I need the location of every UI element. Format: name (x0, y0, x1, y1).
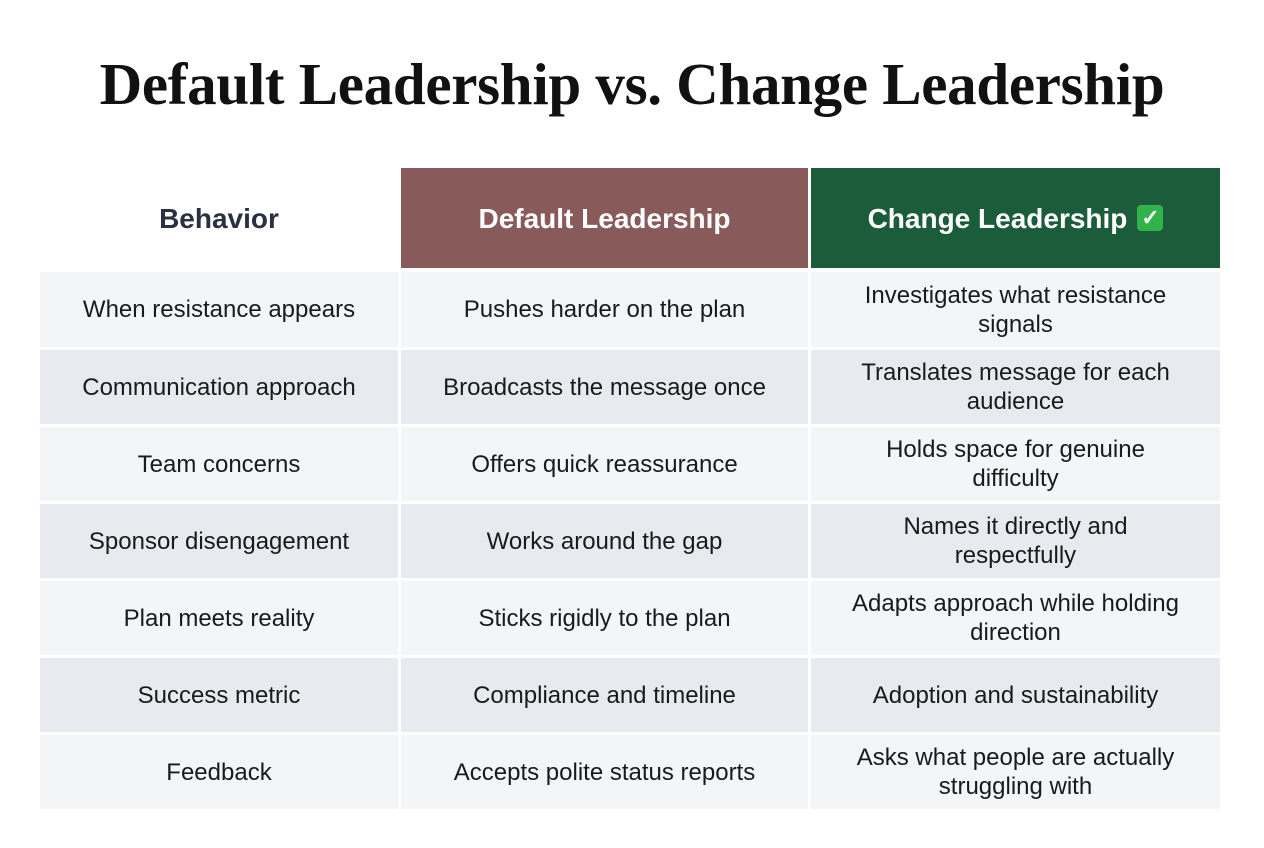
header: change leadership: ✓ (1141, 205, 1160, 230)
row 1 (40, 272, 398, 347)
table: Sticks rigidly to the plan (478, 604, 731, 632)
table: direction (970, 619, 1061, 646)
header: default leadership (401, 168, 808, 268)
header: default leadership: Default Leadership (478, 202, 731, 234)
row 4: Sponsor disengagement (89, 528, 349, 554)
row 6: Success metric (138, 682, 300, 708)
header: change leadership (811, 168, 1220, 268)
row 2: Communication approach (82, 374, 356, 400)
table: struggling with (939, 773, 1092, 800)
row 5: Plan meets reality (124, 604, 314, 632)
table: Compliance and timeline (473, 682, 736, 708)
header: change leadership: Change Leadership (868, 202, 1127, 234)
table: Pushes harder on the plan (464, 296, 745, 323)
row 5 (40, 581, 398, 655)
row 7 (40, 735, 398, 809)
title: Default Leadership vs. Change Leadership (100, 51, 1164, 117)
row 6 (40, 658, 398, 732)
table: Works around the gap (487, 528, 722, 554)
table: Accepts polite status reports (454, 758, 755, 786)
table: difficulty (972, 465, 1059, 492)
row 7: Feedback (166, 758, 272, 786)
table: Asks what people are actually (857, 744, 1174, 771)
table: Names it directly and (903, 513, 1128, 540)
table: Broadcasts the message once (443, 374, 766, 400)
row 4 (40, 504, 398, 578)
row 3: Team concerns (138, 450, 300, 478)
header: behavior: Behavior (159, 202, 279, 234)
table: respectfully (955, 542, 1076, 569)
row 3 (40, 427, 398, 501)
row 2 (40, 350, 398, 424)
table: Investigates what resistance (865, 282, 1166, 308)
table: Offers quick reassurance (471, 450, 738, 478)
table: Adapts approach while holding (852, 590, 1179, 617)
table: Translates message for each (861, 359, 1170, 386)
table: Adoption and sustainability (873, 682, 1158, 708)
table: Holds space for genuine (886, 436, 1145, 463)
table: audience (967, 388, 1064, 415)
table: signals (978, 310, 1053, 338)
row 1: When resistance appears (83, 296, 355, 323)
